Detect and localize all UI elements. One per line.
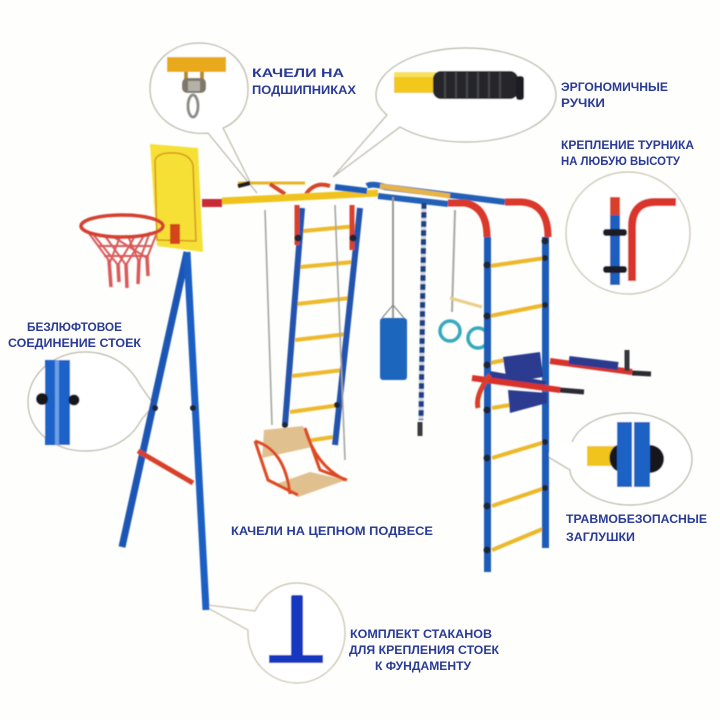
backboard [150, 144, 203, 252]
label: handles: ЭРГОНОМИЧНЫЕ [561, 82, 668, 94]
callout: foundation sockets [208, 583, 345, 683]
dip bar attachment [472, 350, 651, 413]
basketball net [88, 230, 158, 288]
callout: adjustable bar mount [566, 172, 690, 294]
label: bearing swing: КАЧЕЛИ НА [252, 68, 344, 80]
top beams and frame [202, 183, 548, 237]
label: handles line 2: РУЧКИ [561, 98, 605, 110]
callout: safe plugs [545, 413, 692, 505]
callout: ergonomic handles [333, 48, 556, 177]
callout: bearing swing [150, 43, 257, 193]
basketball stand [122, 252, 206, 610]
label: sockets line 3: К ФУНДАМЕНТУ [375, 661, 472, 673]
climbing rope [420, 203, 424, 436]
label: bearing swing line 2: ПОДШИПНИКАХ [252, 85, 356, 97]
basketball hoop [81, 215, 163, 237]
label: sockets: КОМПЛЕКТ СТАКАНОВ [350, 629, 492, 641]
label: joint: БЕЗЛЮФТОВОЕ [27, 322, 122, 334]
label: plugs line 2: ЗАГЛУШКИ [566, 532, 635, 544]
left ladder [282, 205, 360, 445]
label: sockets line 2: ДЛЯ КРЕПЛЕНИЯ СТОЕК [349, 645, 500, 657]
label: bar mount: КРЕПЛЕНИЕ ТУРНИКА [561, 140, 694, 152]
right ladder [484, 237, 549, 572]
gymnastic rings [440, 210, 488, 348]
label: plugs: ТРАВМОБЕЗОПАСНЫЕ [566, 514, 707, 526]
punching bag [380, 197, 407, 380]
label: joint line 2: СОЕДИНЕНИЕ СТОЕК [8, 338, 142, 350]
callout: backlash-free joint [28, 352, 154, 451]
chain swing [255, 205, 347, 497]
label: bar mount line 2: НА ЛЮБУЮ ВЫСОТУ [561, 156, 681, 168]
label: chain swing: КАЧЕЛИ НА ЦЕПНОМ ПОДВЕСЕ [231, 526, 433, 538]
